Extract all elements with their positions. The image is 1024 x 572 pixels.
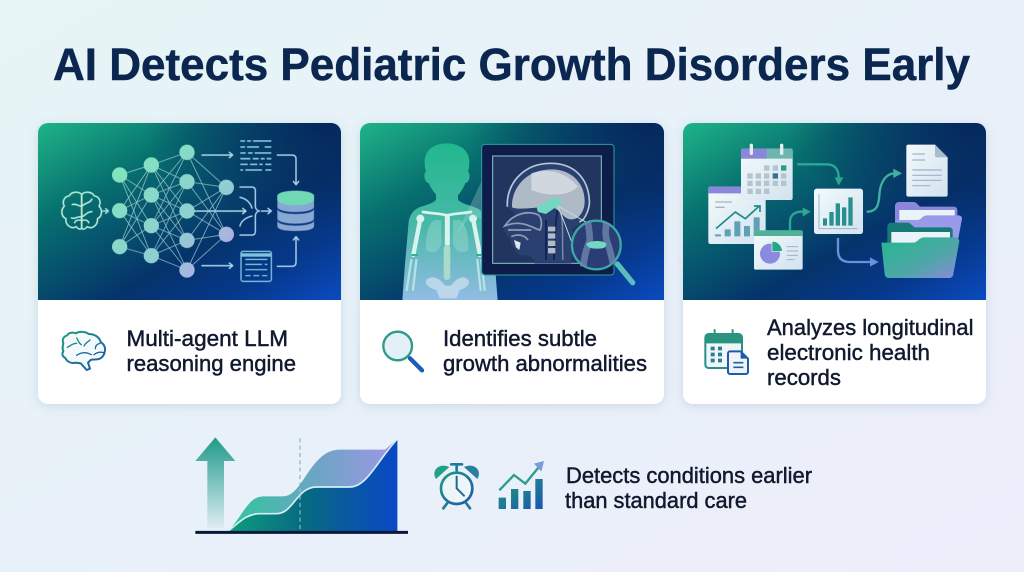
growth chart bbox=[195, 437, 408, 532]
icon: growth bars bbox=[499, 461, 544, 509]
network edges bbox=[120, 152, 226, 270]
label: analyzes longitudinal electronic health records: records bbox=[767, 365, 841, 390]
baseline bbox=[195, 528, 408, 537]
scan monitor bbox=[482, 144, 614, 275]
center bar chart card bbox=[814, 189, 863, 234]
text: detects conditions earlier: than standard care bbox=[565, 488, 747, 513]
document bbox=[906, 145, 948, 197]
title: AI Detects Pediatric Growth Disorders Early bbox=[53, 39, 970, 90]
illustration: records workflow bbox=[683, 123, 986, 300]
icon: magnifying glass bbox=[383, 332, 422, 370]
label: multi-agent LLM reasoning engine bbox=[126, 326, 296, 376]
label: identifies subtle growth abnormalities: growth abnormalities bbox=[443, 351, 647, 376]
text: detects conditions earlier bbox=[565, 463, 812, 513]
up arrow bbox=[195, 437, 235, 528]
dashed marker bbox=[298, 438, 301, 532]
icon: brain outline bbox=[62, 192, 101, 229]
label: analyzes longitudinal electronic health records: Analyzes longitudinal bbox=[767, 315, 974, 340]
front area bbox=[228, 439, 397, 531]
label: multi-agent LLM reasoning engine: Multi-agent LLM bbox=[126, 326, 288, 351]
magnifier bbox=[617, 264, 633, 283]
network nodes bbox=[112, 145, 234, 278]
text: detects conditions earlier: Detects conditions earlier bbox=[566, 463, 812, 488]
flow arrows bbox=[790, 164, 895, 262]
chart card bbox=[708, 187, 766, 244]
child silhouette bbox=[402, 143, 498, 305]
panel: multi-agent LLM reasoning engine bbox=[38, 123, 341, 404]
arrows bbox=[103, 152, 299, 268]
icon: database bbox=[277, 191, 314, 231]
icon: text list bbox=[240, 141, 271, 170]
skull scan bbox=[504, 163, 589, 263]
scan beam bbox=[457, 182, 482, 234]
label: identifies subtle growth abnormalities bbox=[443, 326, 647, 376]
pie chart card bbox=[754, 230, 803, 270]
card background bbox=[38, 123, 341, 404]
callout lines bbox=[558, 206, 586, 242]
label: multi-agent LLM reasoning engine: reasoning engine bbox=[126, 351, 296, 376]
panel: subtle growth abnormalities bbox=[360, 123, 664, 404]
icon: alarm clock bbox=[434, 464, 479, 508]
label: analyzes longitudinal electronic health records: electronic health bbox=[767, 340, 930, 365]
illustration: child skeleton and scan bbox=[360, 123, 664, 305]
label: identifies subtle growth abnormalities: Identifies subtle bbox=[443, 326, 597, 351]
highlighted pituitary bbox=[537, 197, 563, 214]
icon: brain bbox=[62, 332, 105, 370]
calendar card bbox=[741, 149, 793, 200]
card background bbox=[360, 123, 664, 404]
icon: calendar with document bbox=[705, 330, 748, 374]
folders bbox=[895, 202, 958, 223]
panel: longitudinal electronic health records bbox=[683, 123, 986, 404]
curve highlight bbox=[228, 439, 397, 531]
bones bbox=[407, 212, 485, 290]
card background bbox=[683, 123, 986, 404]
back area bbox=[228, 439, 397, 531]
label: analyzes longitudinal electronic health records bbox=[767, 315, 974, 390]
icon: document form bbox=[241, 251, 271, 281]
illustration: neural network to database bbox=[38, 123, 341, 300]
